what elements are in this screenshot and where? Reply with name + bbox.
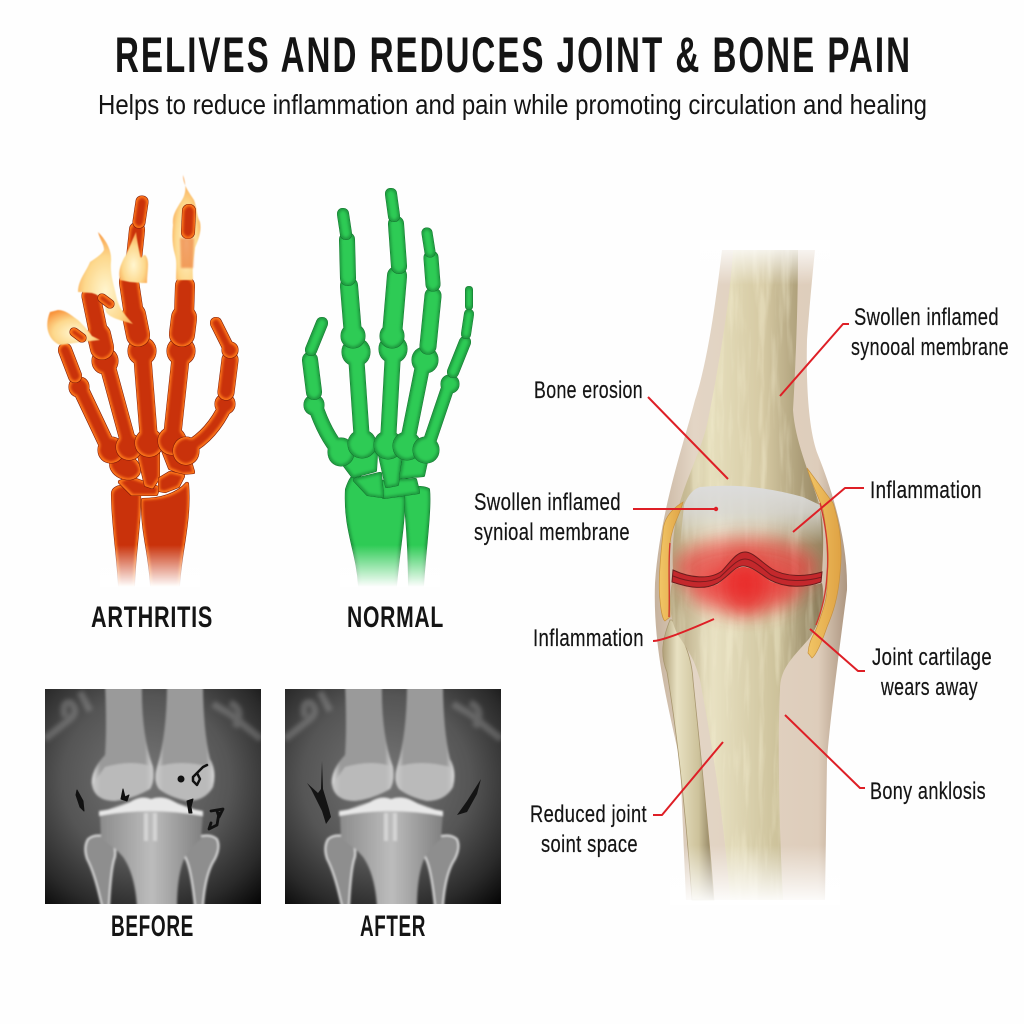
index (158, 337, 195, 455)
pinky (69, 377, 124, 463)
tibia (670, 567, 823, 900)
callout: bone erosion: Bone erosion (534, 377, 643, 404)
middle (374, 335, 407, 459)
ulna (113, 487, 139, 585)
callout: joint cartilage (872, 644, 992, 701)
radius (143, 484, 188, 585)
flames on fingers (47, 175, 201, 345)
label: arthritis: ARTHRITIS (91, 601, 213, 634)
normal green hand skeleton (304, 194, 469, 585)
knee joint anatomy (655, 240, 847, 905)
callout: swollen inflamed synovial membrane right (851, 304, 1009, 361)
callout: joint cartilage: wears away (880, 674, 978, 701)
soft tissue (655, 250, 847, 900)
bone texture, grey cap and red inflammation glow (670, 258, 823, 872)
fibula (663, 620, 714, 900)
ring (92, 348, 142, 460)
middle (128, 337, 163, 457)
femur (673, 250, 823, 577)
radius (347, 475, 403, 585)
pinky (413, 375, 459, 463)
label: before: BEFORE (111, 910, 194, 943)
callout: joint cartilage: Joint cartilage (872, 644, 992, 671)
callout: inflammation right: Inflammation (870, 477, 982, 504)
arthritic red hand skeleton with flames (65, 202, 238, 585)
fade at foot of red hand (100, 545, 200, 587)
callout: bony anklosis: Bony anklosis (870, 778, 986, 805)
x-ray after (285, 683, 501, 907)
ring (393, 347, 438, 460)
callout: swollen inflamed synovial membrane left (474, 489, 630, 546)
callout: reduced joint space: Reduced joint (530, 801, 647, 828)
index (342, 338, 376, 458)
label: normal: NORMAL (347, 601, 444, 634)
fade top and bottom (700, 240, 830, 285)
callout: inflammation left: Inflammation (533, 625, 644, 652)
thumb (173, 394, 235, 465)
cartilage bands (672, 552, 822, 587)
callout: reduced joint space (530, 801, 647, 858)
thumb (304, 395, 354, 466)
callout: swollen inflamed synovial membrane left: synioal membrane (474, 519, 630, 546)
black marks (307, 761, 481, 824)
x-ray before (45, 683, 261, 907)
yellow synovial strips (659, 502, 683, 621)
ulna (405, 488, 428, 585)
label: after: AFTER (360, 910, 426, 943)
leader lines (633, 324, 865, 815)
black damage marks (76, 765, 223, 829)
fade at foot of green hand (340, 545, 440, 587)
callout: swollen inflamed synovial membrane left: Swollen inflamed (474, 489, 621, 516)
callout: reduced joint space: soint space (541, 831, 638, 858)
